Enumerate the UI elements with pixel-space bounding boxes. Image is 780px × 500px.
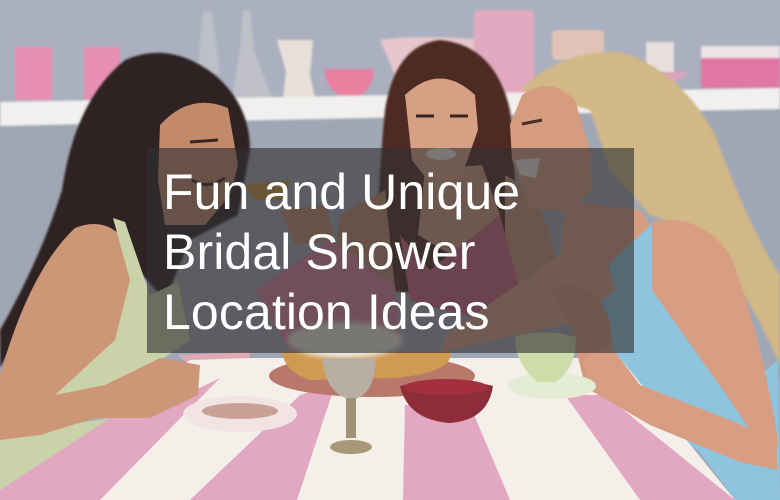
blonde hair	[520, 52, 780, 365]
green top hem	[0, 418, 110, 490]
striped table	[0, 358, 735, 500]
eye and smile	[190, 140, 225, 185]
hair	[375, 40, 515, 300]
jam bowl	[400, 379, 493, 423]
left woman	[0, 53, 250, 488]
small plate	[183, 396, 297, 432]
blue top	[600, 220, 780, 500]
pastry plate	[269, 352, 475, 397]
arm across table	[440, 235, 615, 352]
cup in hand	[178, 352, 250, 380]
body	[0, 224, 150, 445]
eyes and laughing mouth	[416, 114, 468, 118]
hand with pastry	[280, 205, 335, 245]
neck and chest	[418, 165, 500, 260]
title: Fun and Unique	[163, 164, 520, 220]
wall background	[0, 0, 780, 380]
title	[163, 164, 520, 340]
top	[0, 218, 190, 488]
right forearm	[582, 345, 778, 470]
neck and chest	[560, 200, 650, 300]
face	[158, 103, 238, 225]
goblet	[322, 358, 376, 454]
flowers	[287, 322, 403, 358]
face	[405, 78, 478, 190]
middle woman	[245, 40, 557, 352]
title: Location Ideas	[163, 284, 490, 340]
shelf with tableware	[0, 10, 780, 126]
hair	[0, 53, 250, 368]
eye and laughing mouth	[522, 120, 542, 124]
shoulder and upper arm	[652, 220, 778, 468]
title: Bridal Shower	[163, 224, 476, 280]
pink top	[400, 215, 520, 320]
arms	[330, 190, 395, 300]
face	[510, 86, 592, 212]
dark translucent title panel	[147, 148, 634, 353]
left forearm	[0, 358, 200, 440]
teacup and saucer	[508, 332, 596, 399]
right hand	[550, 284, 615, 385]
right woman	[440, 52, 780, 500]
